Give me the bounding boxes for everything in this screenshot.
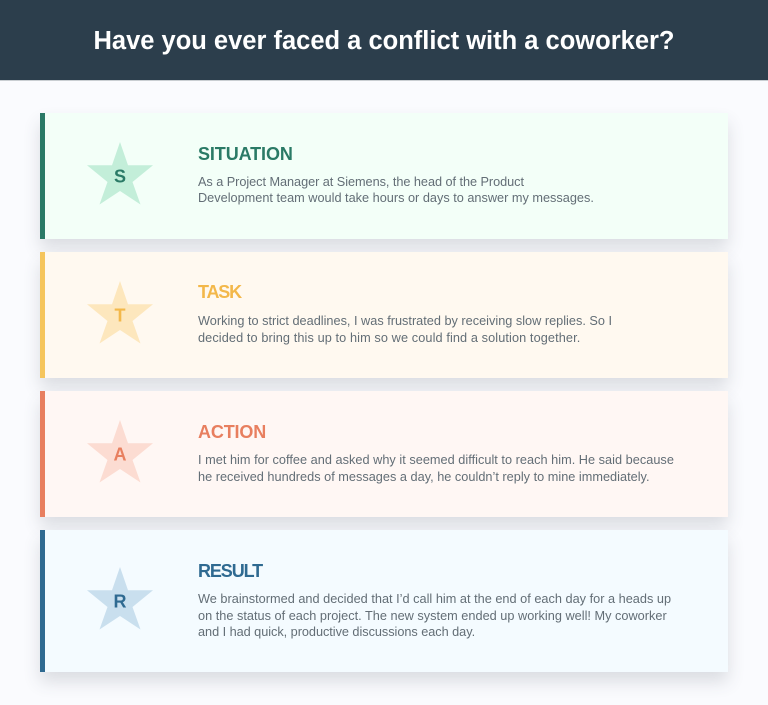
icon: star S [87, 142, 153, 204]
text: situation: Development team would take hours or days to answer my messages. [198, 190, 594, 205]
text: task: Working to strict deadlines, I was frustrated by receiving slow replies. So I [198, 313, 612, 328]
text: result: and I had quick, productive discussions each day. [198, 624, 475, 639]
text: action: he received hundreds of messages a day, he couldn’t reply to mine immediately. [198, 468, 650, 484]
heading: result: RESULT [198, 561, 262, 581]
panel: result [40, 530, 728, 672]
text: result: on the status of each project. The new system ended up working well! My coworker [198, 608, 667, 622]
panel: situation [40, 113, 728, 239]
heading: action: ACTION [198, 422, 266, 442]
heading: situation: SITUATION [198, 144, 293, 164]
heading: task: TASK [198, 282, 241, 302]
icon: star T [87, 281, 153, 344]
text: task [198, 313, 612, 344]
icon: star R: R [114, 592, 126, 612]
title banner [0, 0, 768, 81]
panel: task [40, 252, 728, 378]
text: situation: As a Project Manager at Siemens, the head of the Product [198, 174, 524, 189]
text: action: I met him for coffee and asked why it seemed difficult to reach him. He said because [198, 452, 674, 467]
text: result [198, 591, 671, 639]
text: situation [198, 174, 594, 205]
icon: star R [87, 568, 153, 630]
icon: star A [87, 420, 153, 482]
panel: action [40, 391, 728, 517]
text: result: We brainstormed and decided that I’d call him at the end of each day for a heads up [198, 591, 671, 606]
icon: star S: S [114, 166, 126, 186]
title: Have you ever faced a conflict with a coworker? [93, 27, 675, 55]
text: action [198, 452, 674, 484]
text: task: decided to bring this up to him so we could find a solution together. [198, 330, 580, 344]
icon: star A: A [114, 444, 126, 464]
icon: star T: T [114, 306, 126, 326]
